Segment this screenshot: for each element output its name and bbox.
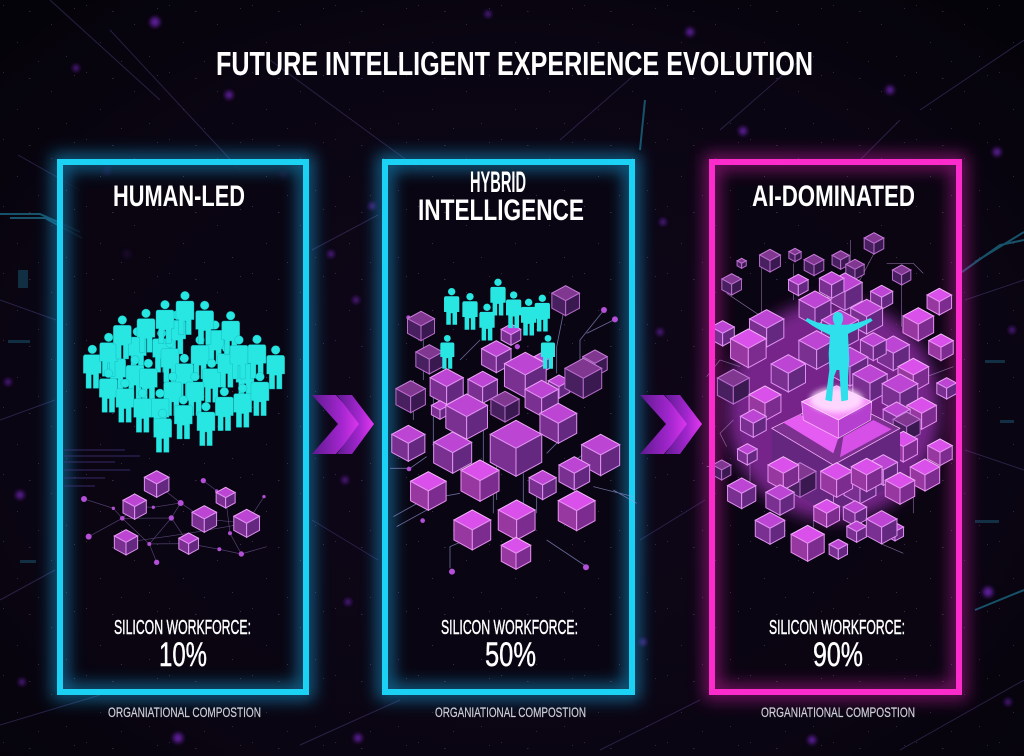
frame: magenta border — [712, 162, 959, 692]
heading: human-led: HUMAN-LED — [113, 180, 245, 213]
diagram: small cube network — [81, 471, 267, 565]
panel: ai-dominated — [707, 162, 959, 692]
stat value: 10%: 10% — [159, 636, 207, 674]
caption: column two: ORGANIATIONAL COMPOSTION — [435, 704, 586, 720]
heading: hybrid intelligence: INTELLIGENCE — [418, 194, 584, 227]
faint light streaks — [64, 450, 140, 486]
title: FUTURE INTELLIGENT EXPERIENCE EVOLUTION — [216, 45, 813, 82]
caption: column one: ORGANIATIONAL COMPOSTION — [108, 704, 261, 720]
diagram: dominant cube tower with figure — [707, 233, 956, 561]
arrow: chevrons one — [312, 395, 374, 454]
panel: human-led — [60, 162, 306, 692]
icon: crowd of people — [83, 291, 285, 452]
stat label: SILICON WORKFORCE: — [769, 617, 905, 639]
caption: column three: ORGANIATIONAL COMPOSTION — [761, 704, 915, 720]
stat value: 50%: 50% — [485, 636, 536, 674]
stat value: 90%: 90% — [813, 636, 863, 674]
stat label: SILICON WORKFORCE: — [441, 617, 578, 639]
diagram: cubes and few people — [390, 279, 637, 575]
stat label: SILICON WORKFORCE: — [114, 617, 251, 639]
lower block below platform — [772, 397, 900, 513]
heading: ai-dominated: AI-DOMINATED — [752, 180, 915, 213]
heading: hybrid intelligence — [418, 166, 584, 227]
icon: group of people — [440, 279, 555, 369]
heading: hybrid intelligence: HYBRID — [470, 166, 526, 199]
panel: hybrid intelligence — [385, 162, 637, 692]
top platform cube — [802, 386, 872, 438]
icon: figure with raised arms — [805, 312, 873, 401]
arrow: chevrons two — [640, 395, 702, 454]
